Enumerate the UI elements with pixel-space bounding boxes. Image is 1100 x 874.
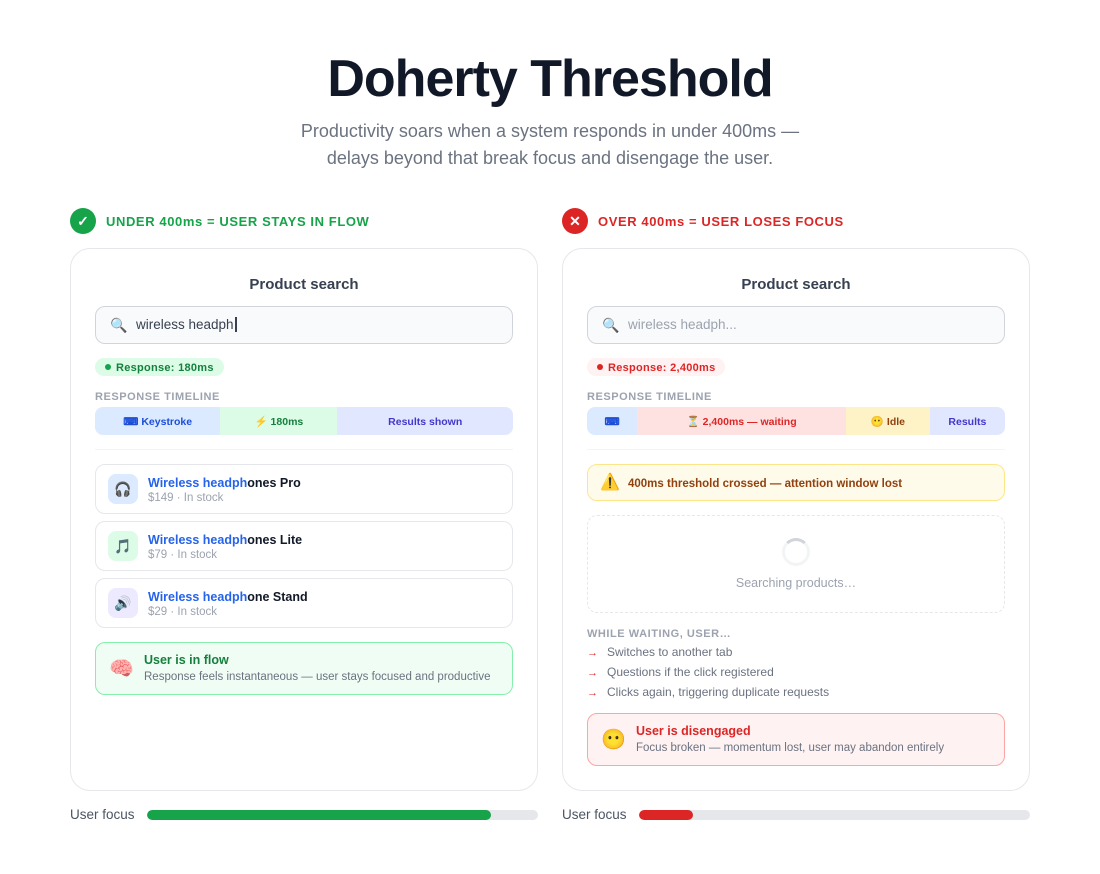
- segment: keystroke: [95, 407, 220, 435]
- icon: headphones: [108, 474, 138, 504]
- response pill: 180ms: [95, 358, 224, 376]
- result: headphones pro: [95, 464, 513, 514]
- subtitle: [301, 121, 800, 168]
- response timeline bar: [95, 407, 513, 435]
- segment: results: Results: [948, 416, 986, 428]
- callout text: Focus broken — momentum lost, user may abandon entirely: [636, 742, 944, 754]
- icon: cross badge: ✕: [569, 212, 581, 228]
- segment: 180ms: [220, 407, 337, 435]
- icon: spinner: [782, 538, 810, 566]
- result price: $149 · In stock: [148, 492, 223, 504]
- title: Doherty Threshold: [327, 50, 773, 108]
- subtitle: delays beyond that break focus and disengage the user.: [327, 148, 773, 168]
- timeline label: RESPONSE TIMELINE: [587, 391, 712, 403]
- result name: Wireless headphones Pro: [148, 476, 301, 490]
- meter label: User focus: [562, 807, 627, 822]
- heading text: over 400ms: OVER 400ms = USER LOSES FOCUS: [598, 214, 844, 228]
- result price: $79 · In stock: [148, 549, 217, 561]
- panel title: Product search: [249, 276, 359, 293]
- behaviour: clicks again: Clicks again, triggering duplicate requests: [607, 685, 829, 699]
- segment: keystroke: [587, 407, 637, 435]
- loading placeholder: [587, 515, 1005, 613]
- callout: user is disengaged: [587, 713, 1005, 766]
- result name: Wireless headphones Lite: [148, 533, 302, 547]
- icon: blank face: 😶: [601, 729, 626, 751]
- meter bar: 14%: [639, 810, 1030, 820]
- segment: 180ms: ⚡ 180ms: [255, 416, 303, 428]
- segment: idle: [846, 407, 930, 435]
- icon: music note: [108, 531, 138, 561]
- segment: keystroke: ⌨ Keystroke: [123, 416, 192, 428]
- result: headphone stand: [95, 578, 513, 628]
- response pill: 2,400ms: [587, 358, 725, 376]
- segment: waiting: [637, 407, 846, 435]
- heading: under 400ms: [70, 208, 369, 234]
- result: headphones lite: [95, 521, 513, 571]
- search box: [587, 306, 1005, 344]
- search box: wireless headph...: [628, 317, 737, 332]
- behaviour: clicks again: →: [587, 687, 598, 699]
- segment: results shown: Results shown: [388, 416, 462, 428]
- loading text: Searching products…: [736, 576, 856, 590]
- segment: results shown: [337, 407, 513, 435]
- warning banner: [587, 464, 1005, 501]
- search box: [95, 306, 513, 344]
- search box: wireless headph: [136, 317, 234, 332]
- callout title: User is in flow: [144, 653, 229, 667]
- behaviour: questions click: →: [587, 667, 598, 679]
- focus meter: low: [562, 807, 1030, 822]
- heading: over 400ms: [562, 208, 844, 234]
- search box: 🔍: [110, 317, 127, 333]
- icon: check badge: [70, 208, 96, 234]
- callout title: User is disengaged: [636, 724, 751, 738]
- callout: user is in flow: [95, 642, 513, 695]
- icon: check badge: ✓: [77, 212, 89, 228]
- response timeline bar: [587, 407, 1005, 435]
- segment: waiting: ⏳ 2,400ms — waiting: [687, 416, 797, 428]
- while waiting label: WHILE WAITING, USER…: [587, 628, 731, 640]
- icon: speaker: [108, 588, 138, 618]
- segment: results: [930, 407, 1005, 435]
- behaviour: switches tab: Switches to another tab: [607, 645, 732, 659]
- callout text: Response feels instantaneous — user stays focused and productive: [144, 670, 490, 682]
- segment: keystroke: ⌨: [604, 416, 620, 428]
- icon: music note: 🎵: [114, 538, 132, 554]
- heading text: under 400ms: UNDER 400ms = USER STAYS IN FLOW: [106, 214, 369, 228]
- icon: speaker: 🔊: [114, 594, 132, 610]
- response pill: 2,400ms: Response: 2,400ms: [608, 362, 715, 374]
- behaviour list: [587, 645, 829, 699]
- icon: cross badge: [562, 208, 588, 234]
- subtitle: Productivity soars when a system responds in under 400ms —: [301, 121, 799, 141]
- panel: fast response: [70, 248, 538, 791]
- icon: brain: 🧠: [109, 658, 134, 680]
- meter bar: 88%: [147, 810, 538, 820]
- focus meter: high: [70, 807, 538, 822]
- result name: Wireless headphone Stand: [148, 590, 308, 604]
- panel: slow response: [562, 248, 1030, 791]
- warning text: 400ms threshold crossed — attention window lost: [628, 478, 902, 490]
- behaviour: questions click: Questions if the click registered: [607, 665, 774, 679]
- icon: headphones: 🎧: [114, 480, 132, 496]
- response pill: 180ms: Response: 180ms: [116, 362, 214, 374]
- timeline label: RESPONSE TIMELINE: [95, 391, 220, 403]
- behaviour: switches tab: →: [587, 647, 598, 659]
- result price: $29 · In stock: [148, 606, 217, 618]
- segment: idle: 😶 Idle: [871, 416, 905, 428]
- meter label: User focus: [70, 807, 135, 822]
- search box: 🔍: [602, 317, 619, 333]
- icon: warning: ⚠️: [600, 474, 620, 491]
- panel title: Product search: [741, 276, 851, 293]
